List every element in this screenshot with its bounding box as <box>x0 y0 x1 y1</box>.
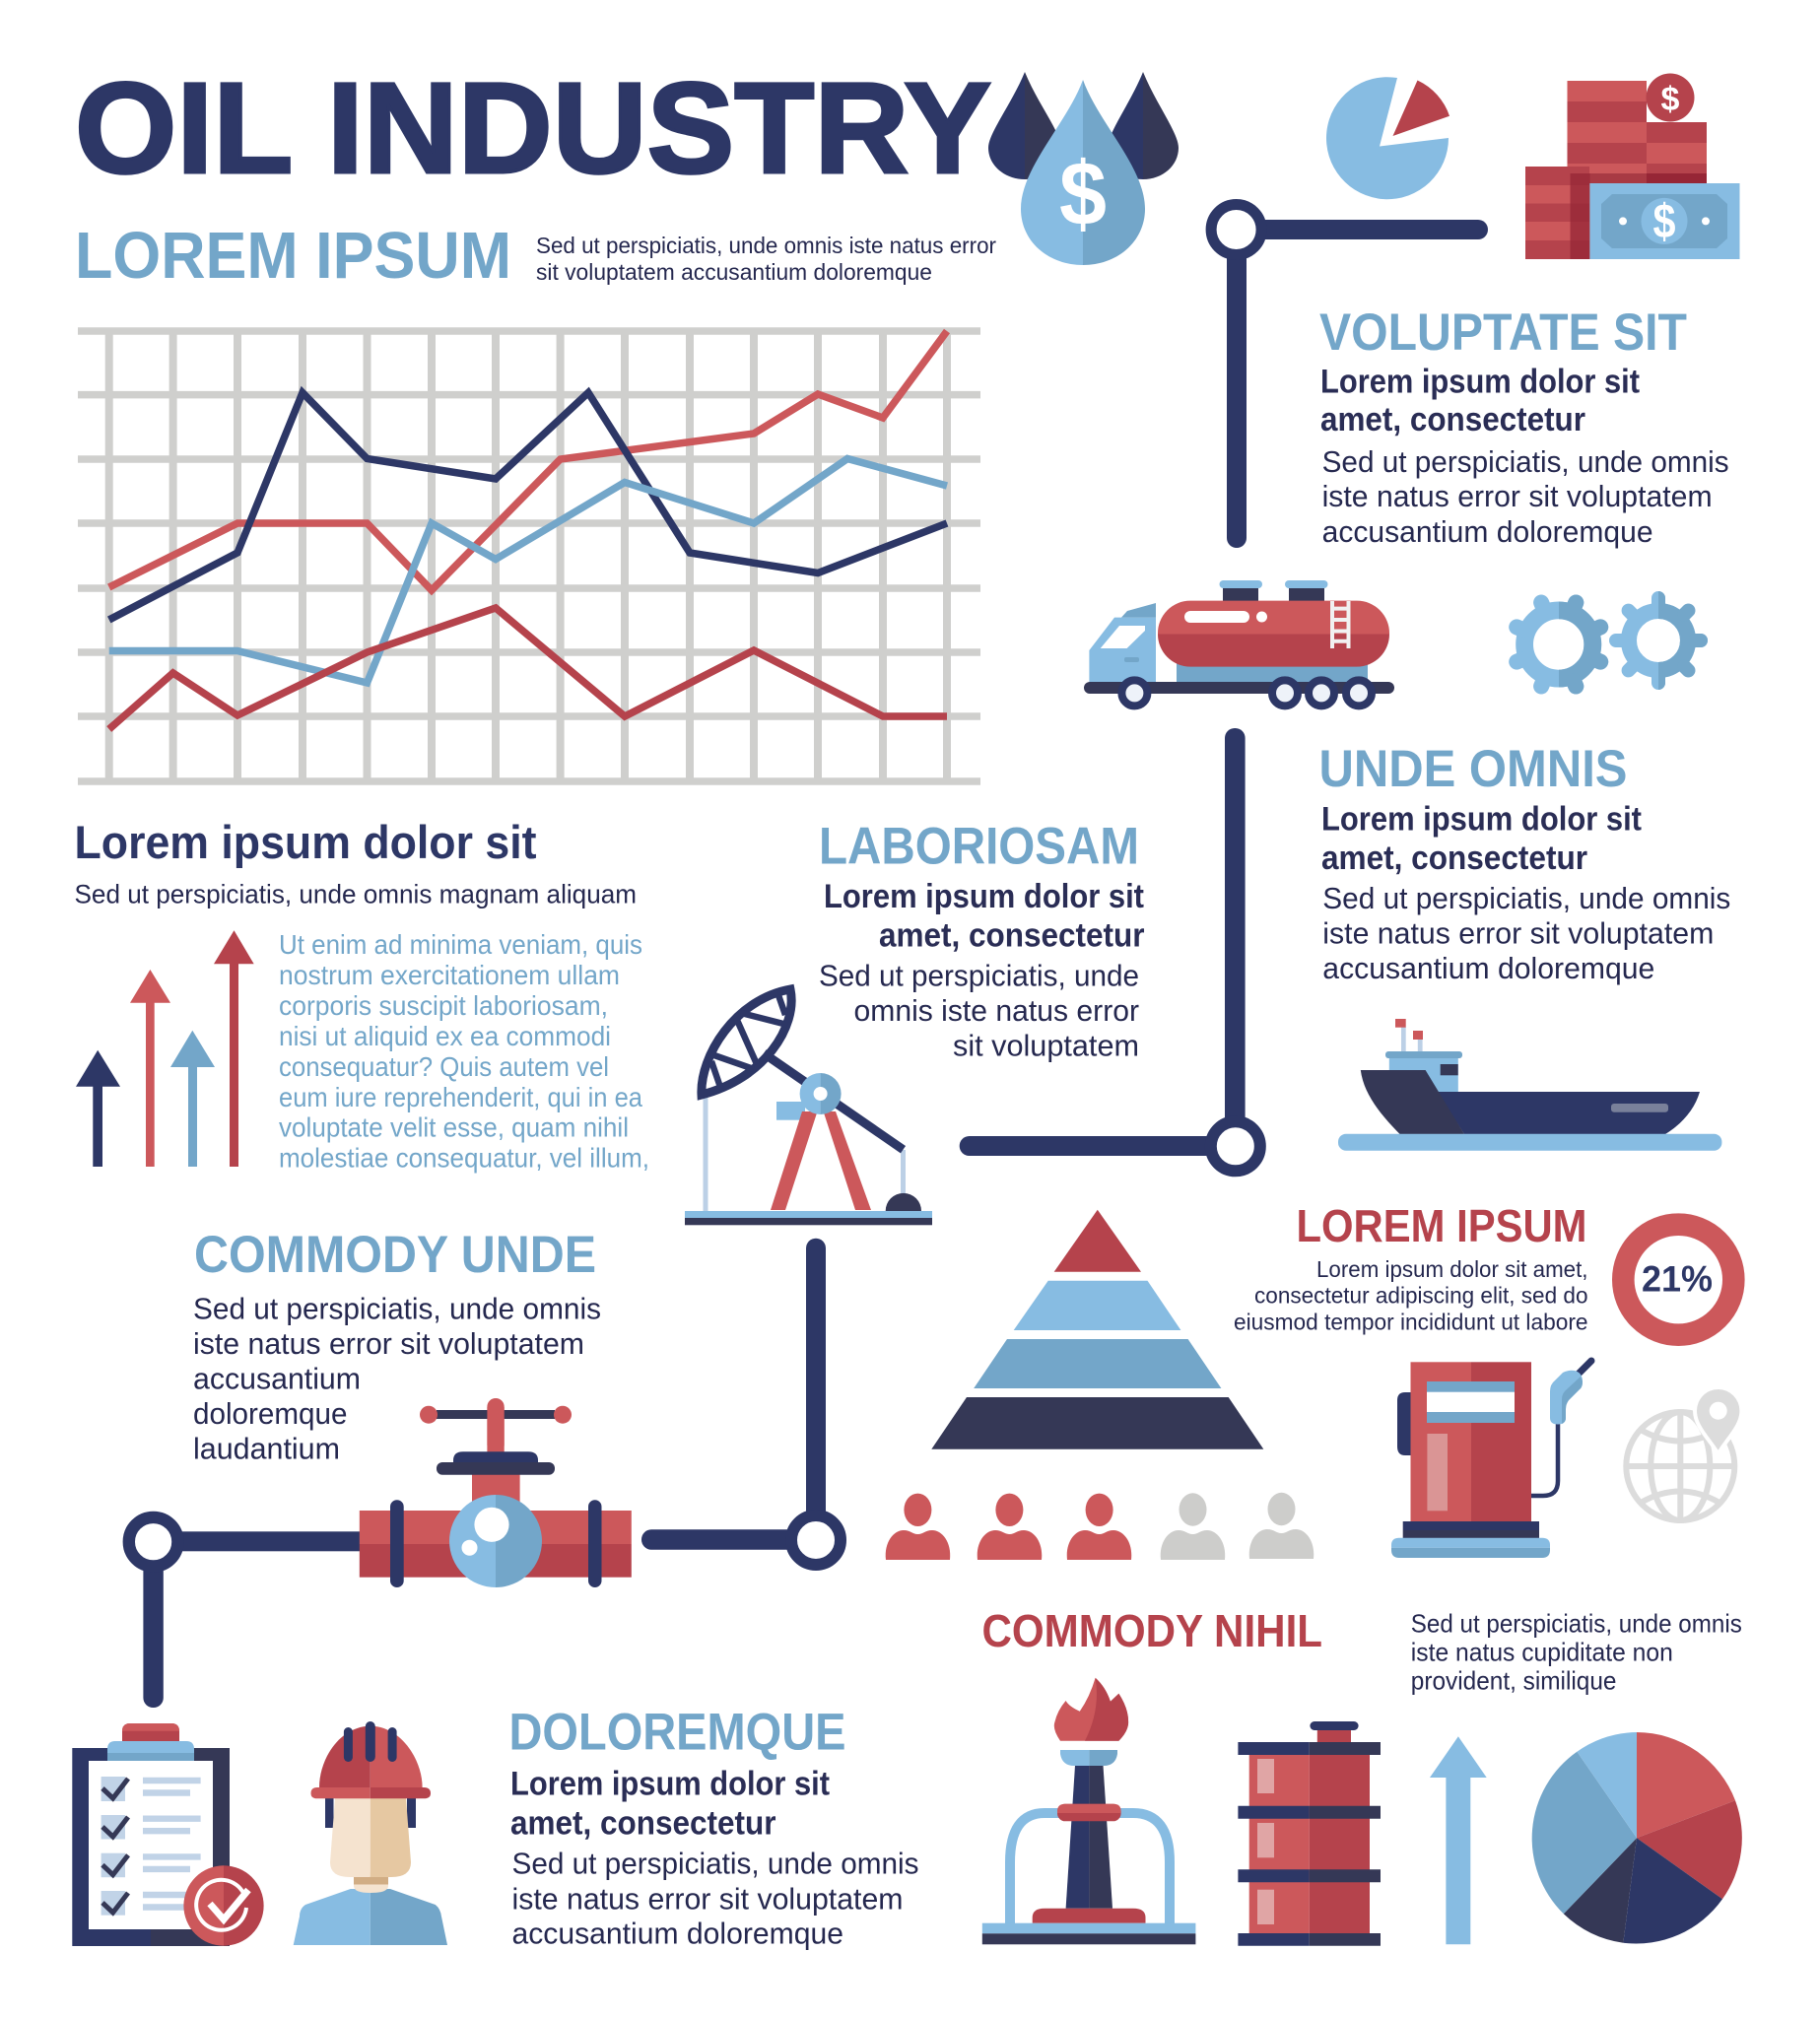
checklist rows <box>101 1777 201 1916</box>
icon: pump jack <box>685 989 932 1225</box>
icon: oil drops with dollar: $ <box>1059 144 1107 244</box>
icon: money stacks <box>1525 73 1740 259</box>
text block: commody unde: accusantium <box>193 1362 361 1395</box>
icon: fuel pump <box>1391 1361 1591 1558</box>
text block: commody unde: Sed ut perspiciatis, unde omnis <box>193 1293 601 1326</box>
gear large <box>1517 603 1600 686</box>
text block: voluptate sit: iste natus error sit voluptatem <box>1322 480 1713 513</box>
icon: gas flare <box>982 1678 1195 1944</box>
text: commody nihil body: provident, similique <box>1411 1665 1616 1695</box>
icon: pipeline valve <box>360 1398 632 1587</box>
intro text: sit voluptatem accusantium doloremque <box>536 259 932 285</box>
intro text: Sed ut perspiciatis, unde omnis iste natus error <box>536 233 996 258</box>
text block: red lorem ipsum <box>1234 1200 1588 1334</box>
icon: growth arrows <box>76 930 254 1167</box>
heading: lorem ipsum: LOREM IPSUM <box>75 219 511 293</box>
text block: commody unde: laudantium <box>193 1432 340 1465</box>
paragraph: blue text: voluptate velit esse, quam nihil <box>279 1112 629 1143</box>
coin: $ <box>1661 81 1680 118</box>
text block: doloremque: Sed ut perspiciatis, unde omnis <box>512 1848 918 1881</box>
donut: 21 percent <box>1623 1225 1733 1335</box>
text block: laboriosam: amet, consectetur <box>879 917 1145 955</box>
heading: lorem ipsum dolor sit: Lorem ipsum dolor sit <box>75 816 537 868</box>
chart line: light red <box>109 331 947 590</box>
text block: laboriosam: Lorem ipsum dolor sit <box>824 878 1144 915</box>
flame <box>1054 1678 1128 1741</box>
connector: middle right <box>960 728 1260 1171</box>
text block: voluptate sit: Lorem ipsum dolor sit <box>1320 363 1640 400</box>
chart line: blue <box>109 459 947 683</box>
hose and nozzle <box>1531 1361 1591 1496</box>
text block: doloremque: amet, consectetur <box>510 1804 776 1842</box>
text block: unde omnis: accusantium doloremque <box>1322 952 1654 985</box>
text block: laboriosam <box>819 818 1145 1063</box>
text block: commody unde: COMMODY UNDE <box>194 1226 596 1284</box>
icon: people row <box>886 1493 1314 1560</box>
text block: unde omnis: UNDE OMNIS <box>1318 740 1628 798</box>
connector: pipeline right <box>641 1239 841 1565</box>
text block: commody unde: iste natus error sit voluptatem <box>193 1327 584 1361</box>
paragraph: blue text: nostrum exercitationem ullam <box>279 960 620 990</box>
paragraph: blue text: eum iure reprehenderit, qui in ea <box>279 1082 642 1112</box>
text block: red lorem ipsum: Lorem ipsum dolor sit amet, <box>1316 1256 1588 1282</box>
subheading: Sed ut perspiciatis, unde omnis magnam aliquam <box>75 880 637 909</box>
donut: 21 percent: 21% <box>1642 1259 1713 1300</box>
text block: red lorem ipsum: eiusmod tempor incididunt ut labore <box>1234 1309 1588 1334</box>
text block: doloremque: Lorem ipsum dolor sit <box>510 1765 830 1802</box>
text block: red lorem ipsum: LOREM IPSUM <box>1297 1200 1586 1251</box>
paragraph: blue text: consequatur? Quis autem vel <box>279 1051 609 1082</box>
paragraph: blue text: Ut enim ad minima veniam, quis <box>279 929 642 960</box>
paragraph: blue text: molestiae consequatur, vel illum, <box>279 1143 649 1174</box>
icon: up arrow <box>1430 1736 1487 1944</box>
text block: voluptate sit: amet, consectetur <box>1320 401 1585 438</box>
banknote <box>1590 183 1740 259</box>
icon: tanker truck <box>1084 580 1394 706</box>
connector: pipeline left <box>129 1517 365 1708</box>
paragraph: blue text: corporis suscipit laboriosam, <box>279 990 608 1021</box>
icon: tanker ship <box>1338 1019 1721 1151</box>
text block: red lorem ipsum: consectetur adipiscing elit, sed do <box>1254 1283 1588 1309</box>
line chart <box>78 331 980 781</box>
text block: voluptate sit <box>1319 303 1729 549</box>
text block: unde omnis: amet, consectetur <box>1321 840 1587 877</box>
chart line: dark red <box>109 608 947 729</box>
coin <box>1646 73 1695 122</box>
connector: top right <box>1211 205 1488 548</box>
text block: unde omnis: Sed ut perspiciatis, unde omnis <box>1322 882 1730 915</box>
icon: pie chart with slice <box>1326 77 1449 199</box>
intro text <box>536 233 996 285</box>
banknote: $ <box>1653 195 1675 248</box>
text: commody nihil body: Sed ut perspiciatis, unde omnis <box>1411 1609 1742 1639</box>
pie chart <box>1532 1732 1742 1944</box>
text block: doloremque: DOLOREMQUE <box>508 1704 845 1762</box>
text: commody nihil body: iste natus cupiditate non <box>1411 1638 1673 1667</box>
text block: unde omnis: iste natus error sit voluptatem <box>1322 917 1714 951</box>
text block: commody unde <box>193 1226 601 1465</box>
text block: unde omnis <box>1318 740 1730 985</box>
text block: commody unde: doloremque <box>193 1397 347 1431</box>
text block: doloremque: iste natus error sit voluptatem <box>512 1882 903 1916</box>
text block: doloremque <box>508 1704 918 1951</box>
badge <box>183 1865 264 1946</box>
text block: doloremque: accusantium doloremque <box>512 1917 843 1951</box>
text: commody nihil body <box>1411 1609 1742 1695</box>
icon: pyramid <box>931 1210 1263 1449</box>
title: OIL INDUSTRY <box>75 55 991 200</box>
paragraph: blue text: nisi ut aliquid ex ea commodi <box>279 1021 611 1051</box>
text block: laboriosam: sit voluptatem <box>953 1030 1139 1063</box>
heading: commody nihil: COMMODY NIHIL <box>981 1605 1322 1656</box>
text block: unde omnis: Lorem ipsum dolor sit <box>1321 801 1642 839</box>
icon: globe with pin <box>1626 1389 1739 1520</box>
gear small <box>1616 598 1701 683</box>
paragraph: blue text <box>279 929 649 1174</box>
chart line: navy <box>109 392 947 620</box>
text block: laboriosam: omnis iste natus error <box>853 994 1139 1028</box>
text block: laboriosam: Sed ut perspiciatis, unde <box>819 960 1139 993</box>
icon: oil barrel <box>1238 1721 1381 1946</box>
text block: voluptate sit: accusantium doloremque <box>1322 515 1653 549</box>
text block: laboriosam: LABORIOSAM <box>819 818 1139 876</box>
text block: voluptate sit: Sed ut perspiciatis, unde omnis <box>1322 445 1729 479</box>
icon: gears <box>1517 598 1701 686</box>
icon: clipboard checklist <box>72 1723 264 1946</box>
text block: voluptate sit: VOLUPTATE SIT <box>1319 303 1687 362</box>
icon: oil worker <box>294 1721 447 1945</box>
icon: oil drops with dollar <box>988 72 1179 265</box>
